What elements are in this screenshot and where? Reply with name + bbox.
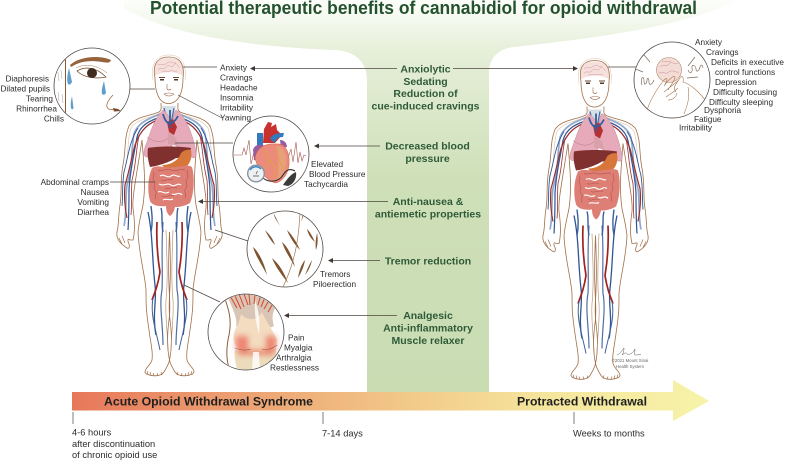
list: pain symptoms: Restlessness (270, 364, 319, 372)
callout: eye symptoms (54, 48, 130, 124)
list: gastrointestinal symptoms: Diarrhea (77, 208, 109, 217)
list: protracted withdrawal symptoms: Anxiety (695, 38, 723, 47)
list: eye symptoms: Dilated pupils (0, 84, 50, 94)
figure: acute withdrawal body (117, 55, 222, 376)
leader lines from body to callouts (110, 67, 637, 302)
list: pain symptoms: Arthralgia (276, 354, 312, 362)
time point: 4-6 hours: of chronic opioid use (72, 450, 157, 460)
benefit: anti-nausea: antiemetic properties (375, 208, 481, 220)
benefit: anxiolytic: cue-induced cravings (372, 100, 480, 112)
list: protracted withdrawal symptoms: Depression (715, 78, 757, 87)
list: cardiovascular symptoms: Elevated (311, 160, 344, 169)
benefit: blood pressure: Decreased blood (385, 140, 470, 152)
benefit: blood pressure: pressure (405, 153, 450, 165)
list: protracted withdrawal symptoms: Deficits in executive (711, 58, 784, 67)
list: gastrointestinal symptoms (41, 178, 109, 217)
list: eye symptoms: Rhinorrhea (16, 104, 57, 114)
list: protracted withdrawal symptoms: Irritability (679, 124, 713, 132)
list: head symptoms (220, 64, 258, 122)
benefit: anxiolytic: Anxiolytic (400, 64, 451, 76)
list: eye symptoms: Tearing (26, 94, 53, 104)
list: tremor symptoms: Piloerection (313, 280, 357, 289)
list: gastrointestinal symptoms: Nausea (81, 188, 109, 197)
list: tremor symptoms (313, 270, 357, 289)
list: protracted withdrawal symptoms: Difficulty sleeping (709, 98, 773, 107)
callout: inflamed knee joint (208, 293, 284, 372)
list: cardiovascular symptoms: Blood Pressure (309, 170, 366, 179)
arrow: blood pressure (314, 144, 380, 148)
green swoosh and central column background (124, 0, 737, 393)
time point: 4-6 hours (72, 428, 157, 460)
list: protracted withdrawal symptoms: Difficulty focusing (713, 88, 777, 97)
list: tremor symptoms: Tremors (320, 270, 350, 279)
benefit: anti-nausea: Anti-nausea & (393, 196, 464, 208)
arrow: anti-nausea (198, 199, 388, 204)
signature and copyright: Health System (616, 364, 644, 369)
callout: piloerection hairs (247, 211, 323, 287)
list: head symptoms: Cravings (220, 74, 253, 82)
list: head symptoms: Headache (220, 84, 258, 92)
list: head symptoms: Anxiety (220, 64, 248, 72)
list: protracted withdrawal symptoms: Dysphoria (704, 106, 742, 115)
timeline arrow (72, 380, 709, 421)
benefit: blood pressure (385, 140, 470, 165)
benefit: analgesic: Anti-inflammatory (383, 322, 473, 334)
arrow: anxiolytic to acute symptoms (250, 66, 397, 71)
benefit: tremor reduction: Tremor reduction (385, 256, 471, 268)
list: eye symptoms: Chills (44, 114, 64, 124)
timeline tick marks (73, 412, 574, 424)
callout: heart and blood pressure (233, 116, 309, 192)
arrow: anxiolytic to protracted head (453, 66, 578, 71)
benefit: analgesic: Muscle relaxer (392, 335, 464, 347)
list: head symptoms: Insomnia (220, 94, 254, 102)
benefit: anxiolytic: Sedating (403, 76, 448, 88)
list: pain symptoms (270, 334, 319, 372)
figure: protracted withdrawal body (543, 58, 648, 380)
benefit: anxiolytic (372, 64, 480, 112)
list: protracted withdrawal symptoms: control functions (715, 68, 775, 77)
signature and copyright (612, 348, 648, 369)
benefit: anti-nausea (375, 196, 481, 220)
arrow: tremor (328, 258, 380, 263)
list: protracted withdrawal symptoms: Cravings (706, 48, 739, 57)
list: pain symptoms: Myalgia (284, 344, 313, 352)
signature and copyright: ©2021 Mount Sinai (612, 358, 648, 363)
benefit: analgesic (383, 310, 473, 347)
list: gastrointestinal symptoms: Vomiting (77, 198, 109, 207)
list: head symptoms: Irritability (220, 104, 254, 112)
callout: protracted withdrawal head in hands (633, 42, 710, 118)
list: pain symptoms: Pain (288, 334, 305, 342)
list: eye symptoms (0, 74, 64, 124)
list: protracted withdrawal symptoms (679, 38, 784, 132)
list: head symptoms: Yawning (220, 114, 251, 122)
list: gastrointestinal symptoms: Abdominal cramps (41, 178, 109, 187)
time point: 4-6 hours: after discontinuation (72, 439, 155, 449)
benefit: analgesic: Analgesic (403, 310, 453, 322)
time point: weeks to months: Weeks to months (573, 428, 645, 438)
list: cardiovascular symptoms: Tachycardia (304, 180, 348, 189)
list: cardiovascular symptoms (304, 160, 366, 189)
list: eye symptoms: Diaphoresis (5, 74, 49, 84)
timeline label: protracted: Protracted Withdrawal (517, 394, 647, 408)
arrow: analgesic (284, 313, 397, 318)
benefit: anxiolytic: Reduction of (393, 88, 458, 100)
time point: 4-6 hours: 4-6 hours (72, 428, 112, 438)
timeline label: acute: Acute Opioid Withdrawal Syndrome (104, 394, 313, 408)
time point: 7-14 days: 7-14 days (322, 428, 363, 438)
list: protracted withdrawal symptoms: Fatigue (694, 115, 722, 124)
